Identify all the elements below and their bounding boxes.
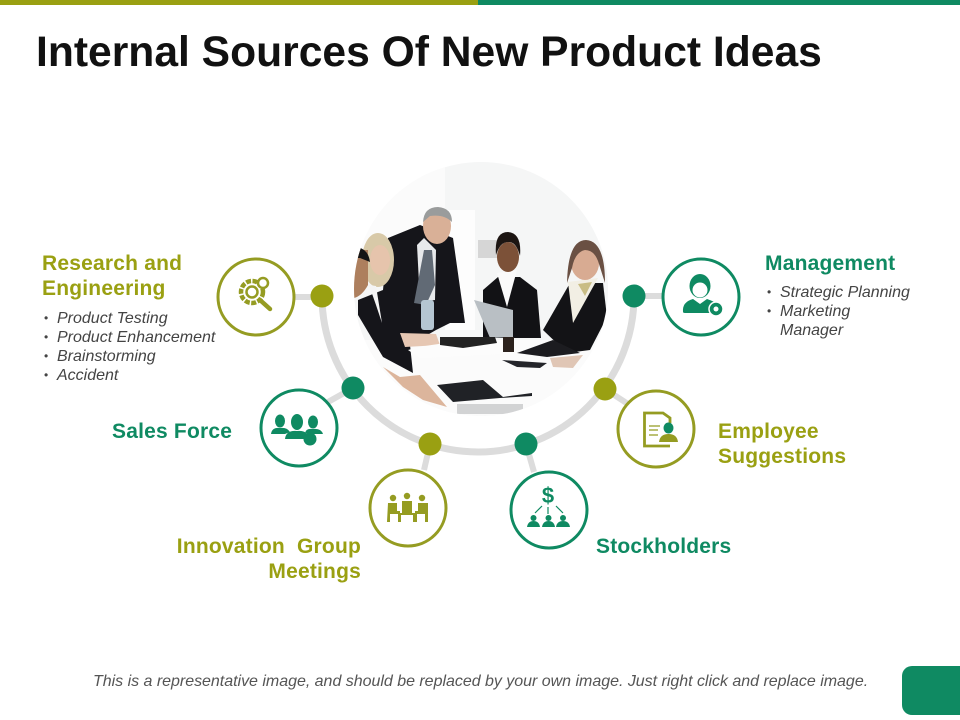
woman right — [543, 283, 607, 353]
list: management items: Marketing — [780, 303, 850, 320]
icon: meeting — [370, 470, 446, 546]
icon: document with person — [618, 391, 694, 467]
top accent bar — [0, 0, 960, 5]
dark mass: left woman and man's jacket — [358, 225, 465, 373]
list: management items — [768, 284, 910, 339]
spokes — [294, 296, 664, 472]
heading: Research and Engineering: Research and — [42, 252, 182, 275]
heading: Management: Management — [765, 252, 895, 275]
water bottle — [421, 300, 434, 330]
heading: Research and Engineering — [42, 252, 182, 300]
icon: gear and magnifier — [218, 259, 294, 335]
diagram graphic — [216, 162, 740, 550]
heading: Employee Suggestions: Suggestions — [718, 445, 846, 468]
table — [350, 340, 610, 420]
photo: business team at table — [350, 160, 610, 420]
heading: Employee Suggestions — [718, 420, 846, 468]
far-left person — [354, 250, 368, 298]
node dots — [310, 284, 646, 456]
icon: manager with gear — [663, 259, 739, 335]
heading: Innovation Group Meetings: Innovation Group — [177, 535, 361, 558]
title: Internal Sources Of New Product Ideas — [36, 28, 822, 76]
man shirt and tie — [417, 238, 436, 302]
corner badge — [902, 666, 960, 715]
blonde woman — [362, 233, 394, 287]
dark folder — [437, 380, 532, 402]
list: management items: Manager — [780, 322, 843, 339]
list: research items: Product Enhancement — [57, 329, 215, 346]
heading: Research and Engineering: Engineering — [42, 277, 166, 300]
laptop — [474, 300, 513, 338]
footer note: This is a representative image, and should be replaced by your own image. Just right click and replace image. — [93, 673, 868, 690]
heading: Innovation Group Meetings: Meetings — [268, 560, 361, 583]
list: research items: Brainstorming — [57, 348, 156, 365]
curved connector arc — [322, 296, 634, 452]
icon: group of people — [261, 390, 337, 466]
woman right-centre — [483, 277, 541, 338]
icon: dollar hierarchy: $ — [542, 483, 554, 508]
table top and items — [408, 344, 440, 352]
list: management items: Strategic Planning — [780, 284, 910, 301]
heading: Employee Suggestions: Employee — [718, 420, 819, 443]
heading: Innovation Group Meetings — [177, 535, 361, 583]
hands on table — [400, 333, 440, 347]
lower-left arm — [383, 367, 447, 407]
heading: Sales Force: Sales Force — [112, 420, 232, 443]
list: research items: Accident — [57, 367, 118, 384]
heading: Stockholders: Stockholders — [596, 535, 731, 558]
icon: dollar hierarchy — [511, 472, 587, 548]
list: research items: Product Testing — [57, 310, 168, 327]
list: research items — [44, 310, 216, 384]
